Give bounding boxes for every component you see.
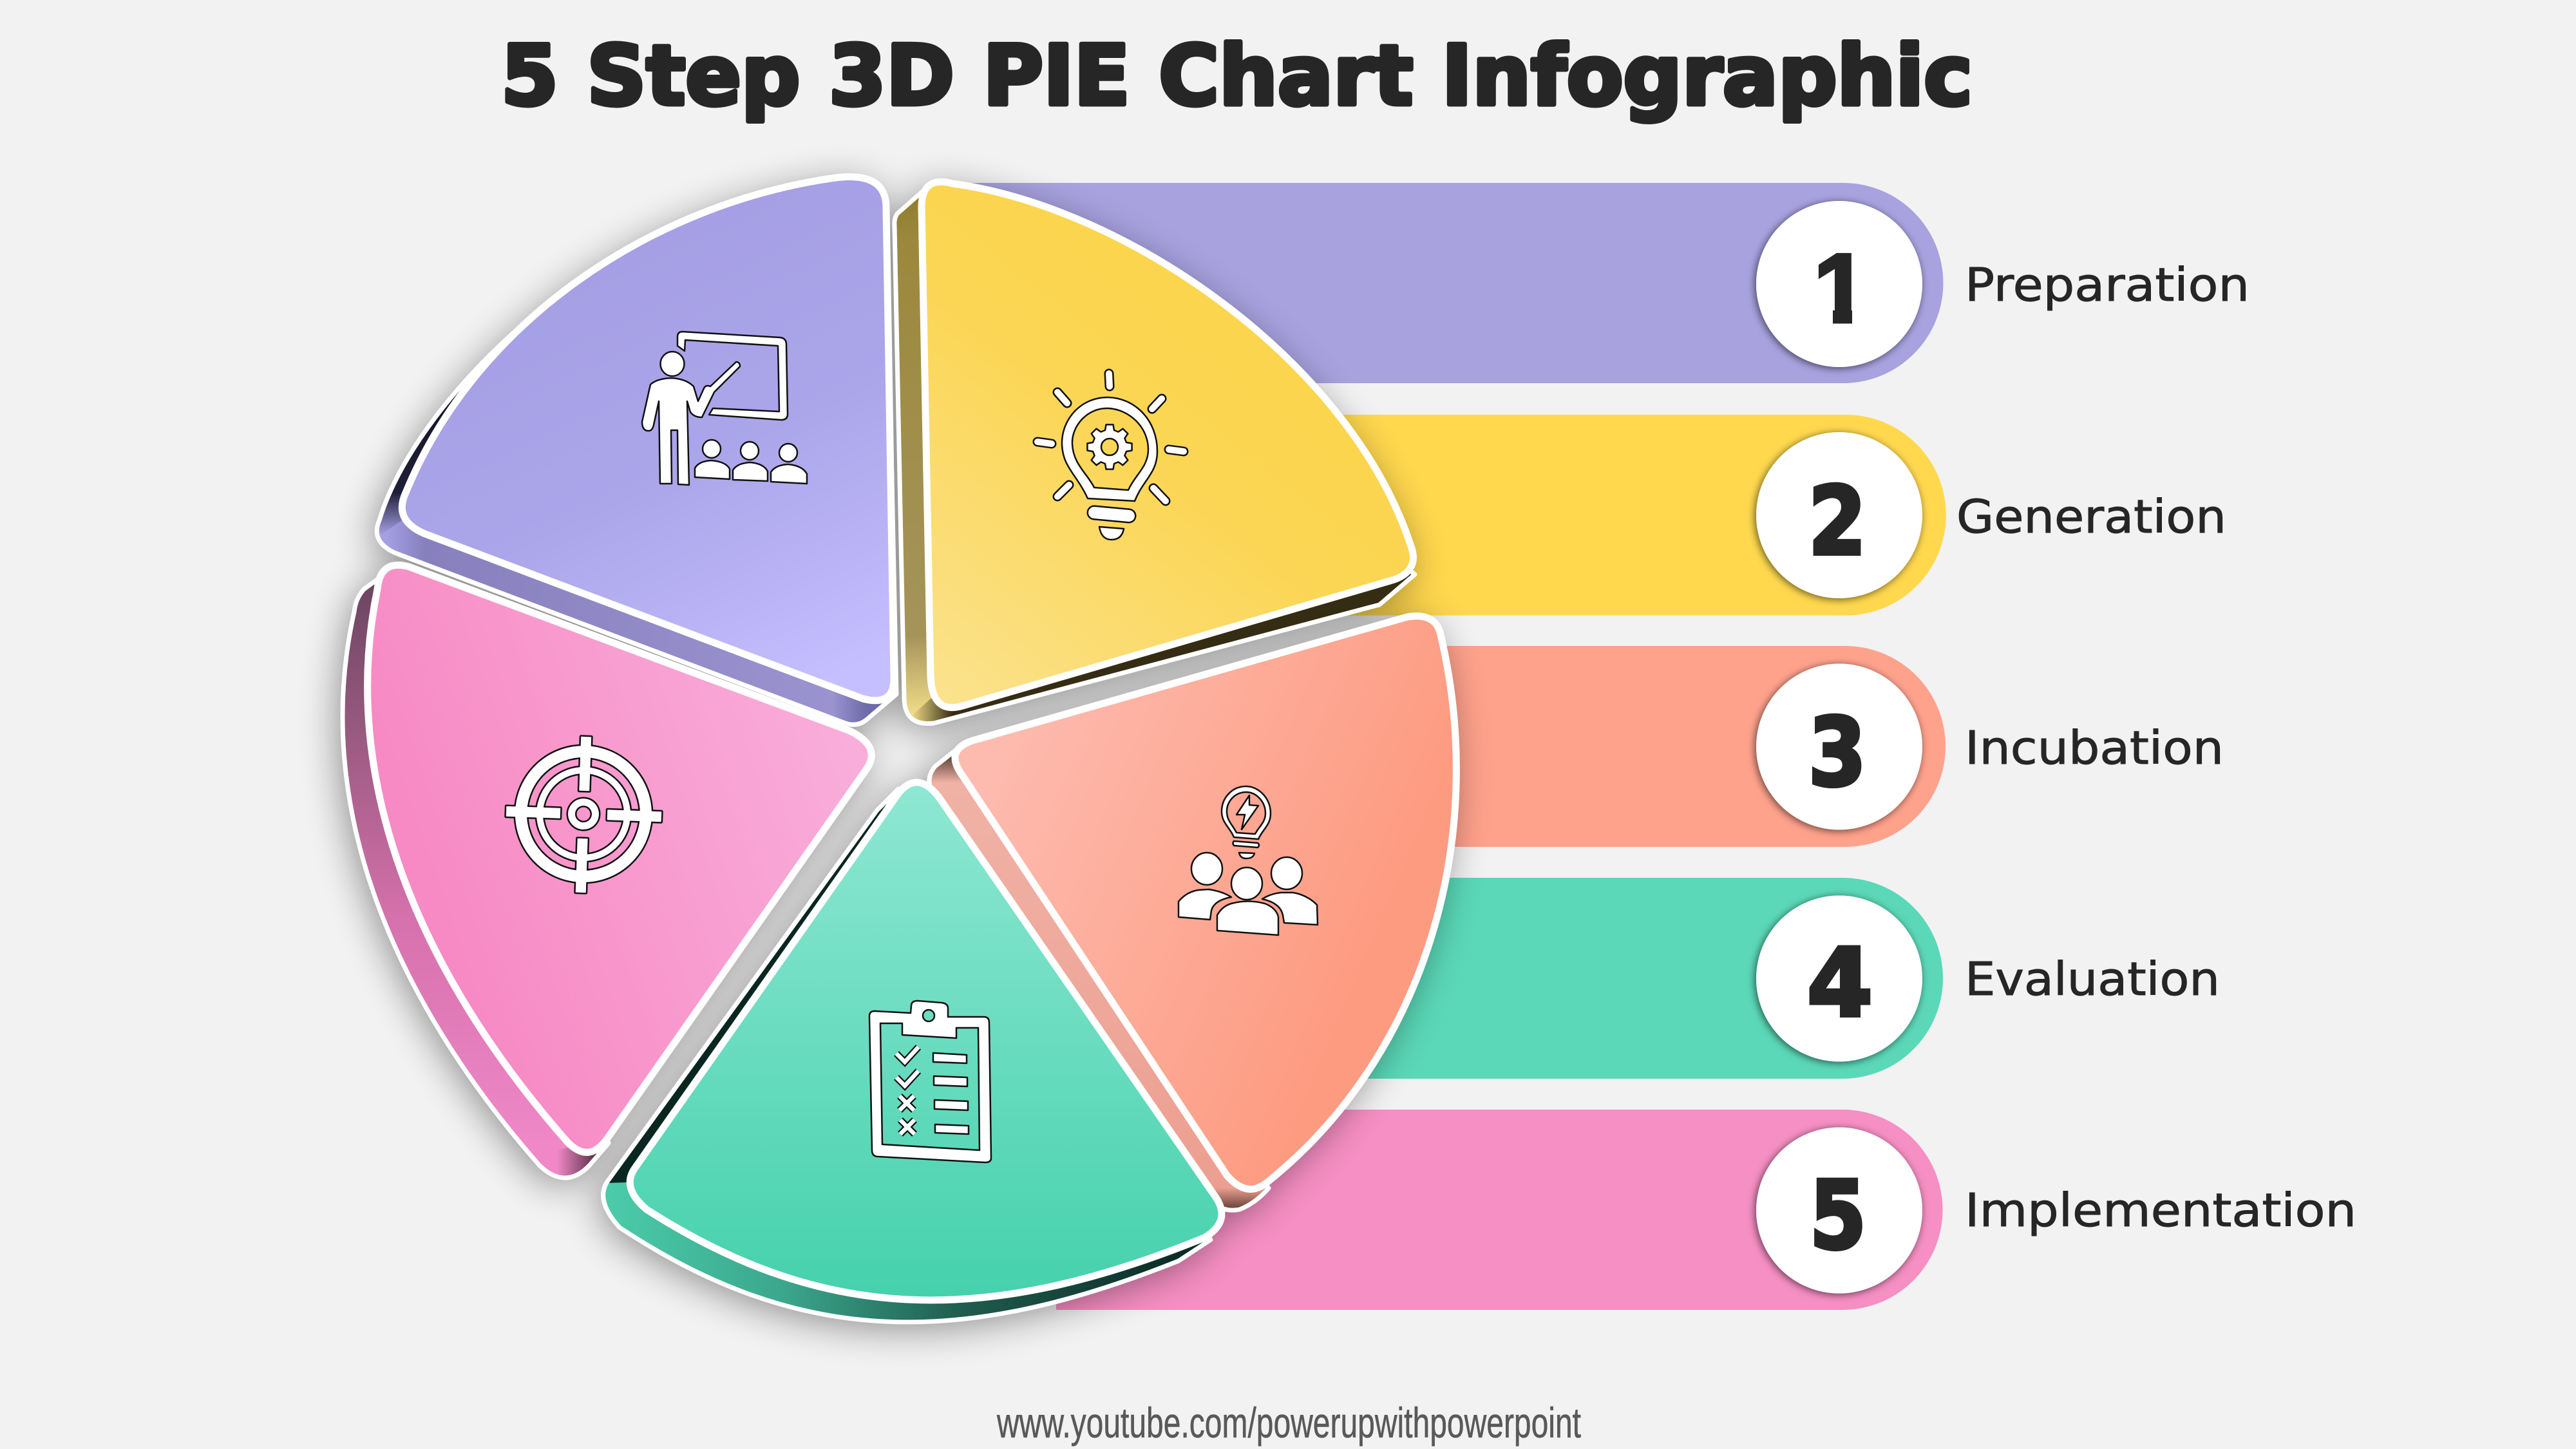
panel: pink pie slice [343,565,871,1191]
step 5 bar: Implementation [1056,1110,2356,1310]
icon: lightbulb with gear [1037,374,1184,540]
step 2 bar: Generation [1342,415,2226,616]
number badge 5: 5 [1810,1161,1866,1271]
label: Implementation: Implementation [1965,1184,2356,1237]
label: Generation: Generation [1956,490,2226,544]
icon: clipboard checklist [869,1001,991,1162]
footer url: www.youtube.com/powerupwithpowerpoint [996,1399,1581,1446]
number badge 2 [1756,432,1922,598]
label: Incubation: Incubation [1965,721,2224,775]
number badge 3: 3 [1808,698,1866,808]
number badge 1: 1 [1814,234,1868,343]
step 4 bar: Evaluation [1352,878,2220,1079]
label: Preparation: Preparation [1965,258,2249,312]
number badge 5 [1756,1127,1922,1293]
panel: coral pie slice [929,616,1456,1210]
number badge 4 [1756,895,1922,1061]
panel: teal pie slice [589,782,1222,1362]
icon: people with idea bulb [1179,786,1318,935]
title: 5 Step 3D PIE Chart Infographic [501,28,1973,124]
panel: yellow pie slice [895,182,1426,731]
pie shadow [339,183,1452,1329]
panel: purple pie slice [377,176,902,731]
icon: teacher at board [642,332,807,485]
label: Evaluation: Evaluation [1965,952,2220,1006]
step 3 bar: Incubation [1417,646,2224,847]
step 1 bar: Preparation [966,183,2249,383]
icon: target crosshair [504,734,664,895]
number badge 2: 2 [1808,467,1866,576]
number badge 3 [1756,663,1922,829]
number badge 1 [1756,201,1922,367]
number badge 4: 4 [1807,929,1873,1038]
